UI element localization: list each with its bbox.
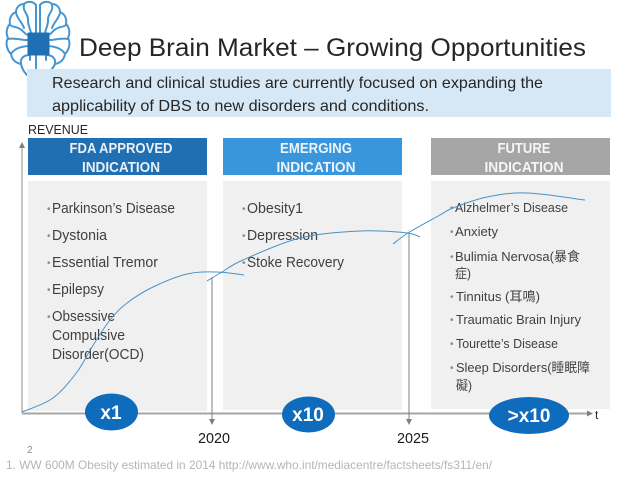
list: future indications: Anxiety <box>455 224 499 239</box>
list: FDA approved indications: • <box>47 231 51 242</box>
list: future indications: 症) <box>455 266 471 281</box>
badge: x1: x1 <box>100 403 122 424</box>
marker: 2020 drop line <box>209 277 215 425</box>
badge: >x10 <box>489 397 569 434</box>
growth curve: third phase <box>393 193 585 244</box>
list: future indications: Alzhelmer’s Disease <box>455 200 568 215</box>
panel: future body <box>431 181 610 409</box>
list: emerging indications: • <box>242 204 246 215</box>
chart axes <box>19 142 593 416</box>
header: emerging indication <box>223 138 402 176</box>
list: FDA approved indications: Obsessive <box>52 309 115 325</box>
header: FDA approved indication: FDA APPROVED <box>70 141 172 157</box>
list: future indications: Traumatic Brain Injury <box>456 312 582 327</box>
badge: x1 <box>85 394 138 430</box>
marker: 2025 drop line <box>406 233 412 425</box>
list: emerging indications: Stoke Recovery <box>247 255 345 271</box>
list: emerging indications: • <box>242 231 246 242</box>
list: future indications: • <box>450 292 454 303</box>
list: future indications: 礙) <box>456 378 472 393</box>
header: FDA approved indication: INDICATION <box>82 160 160 176</box>
list: FDA approved indications: Compulsive <box>52 328 125 344</box>
list: FDA approved indications: Epilepsy <box>52 282 105 298</box>
badge: x10 <box>282 396 335 432</box>
list: FDA approved indications: • <box>47 312 51 323</box>
list: future indications <box>450 200 590 393</box>
list: FDA approved indications: Essential Tremor <box>52 255 158 271</box>
badge: x10: x10 <box>292 405 324 426</box>
callout: research focus: applicability of DBS to new disorders and conditions. <box>52 98 429 115</box>
header: future indication: FUTURE <box>498 141 551 157</box>
list: future indications: • <box>450 227 454 238</box>
panel: emerging body <box>223 181 402 410</box>
list: future indications: • <box>450 339 454 350</box>
growth curve: second phase <box>207 231 420 281</box>
list: FDA approved indications: Disorder(OCD) <box>52 347 144 363</box>
axis label: revenue: REVENUE <box>28 122 88 137</box>
growth curve: first phase <box>22 272 244 412</box>
list: emerging indications: Obesity1 <box>247 201 303 217</box>
list: future indications: Tinnitus (耳鳴) <box>456 289 540 304</box>
list: FDA approved indications <box>47 201 175 363</box>
footnote: 1. WW 600M Obesity estimated in 2014 http://www.who.int/mediacentre/factsheets/fs311/en/ <box>6 458 493 472</box>
list: FDA approved indications: • <box>47 204 51 215</box>
list: future indications: Sleep Disorders(睡眠障 <box>456 360 590 375</box>
icon: brain with microchip <box>7 2 69 75</box>
header: emerging indication: INDICATION <box>276 160 356 176</box>
callout: research focus: Research and clinical studies are currently focused on expanding the <box>52 75 543 92</box>
badge: >x10: >x10 <box>508 406 550 427</box>
list: FDA approved indications: Parkinson’s Disease <box>52 201 175 217</box>
title: Deep Brain Market – Growing Opportunities <box>79 34 586 62</box>
list: FDA approved indications: • <box>47 285 51 296</box>
list: future indications: Tourette’s Disease <box>456 336 558 351</box>
list: future indications: • <box>450 203 454 214</box>
header: emerging indication: EMERGING <box>280 141 352 157</box>
axis label: t: t <box>595 408 599 422</box>
list: future indications: • <box>450 252 454 263</box>
year label: 2025: 2025 <box>397 430 429 447</box>
header: future indication: INDICATION <box>484 160 564 176</box>
list: future indications: • <box>450 315 454 326</box>
list: future indications: • <box>450 363 454 374</box>
header: FDA approved indication <box>28 138 207 176</box>
list: emerging indications: • <box>242 258 246 269</box>
header: future indication <box>431 138 610 176</box>
list: future indications: Bulimia Nervosa(暴食 <box>455 249 580 264</box>
list: emerging indications <box>242 201 345 271</box>
list: FDA approved indications: • <box>47 258 51 269</box>
year label: 2020: 2020 <box>198 430 230 447</box>
panel: FDA approved body <box>28 181 207 411</box>
page number: 2 <box>27 445 33 456</box>
callout: research focus <box>27 69 611 117</box>
list: emerging indications: Depression <box>247 228 318 244</box>
list: FDA approved indications: Dystonia <box>52 228 108 244</box>
